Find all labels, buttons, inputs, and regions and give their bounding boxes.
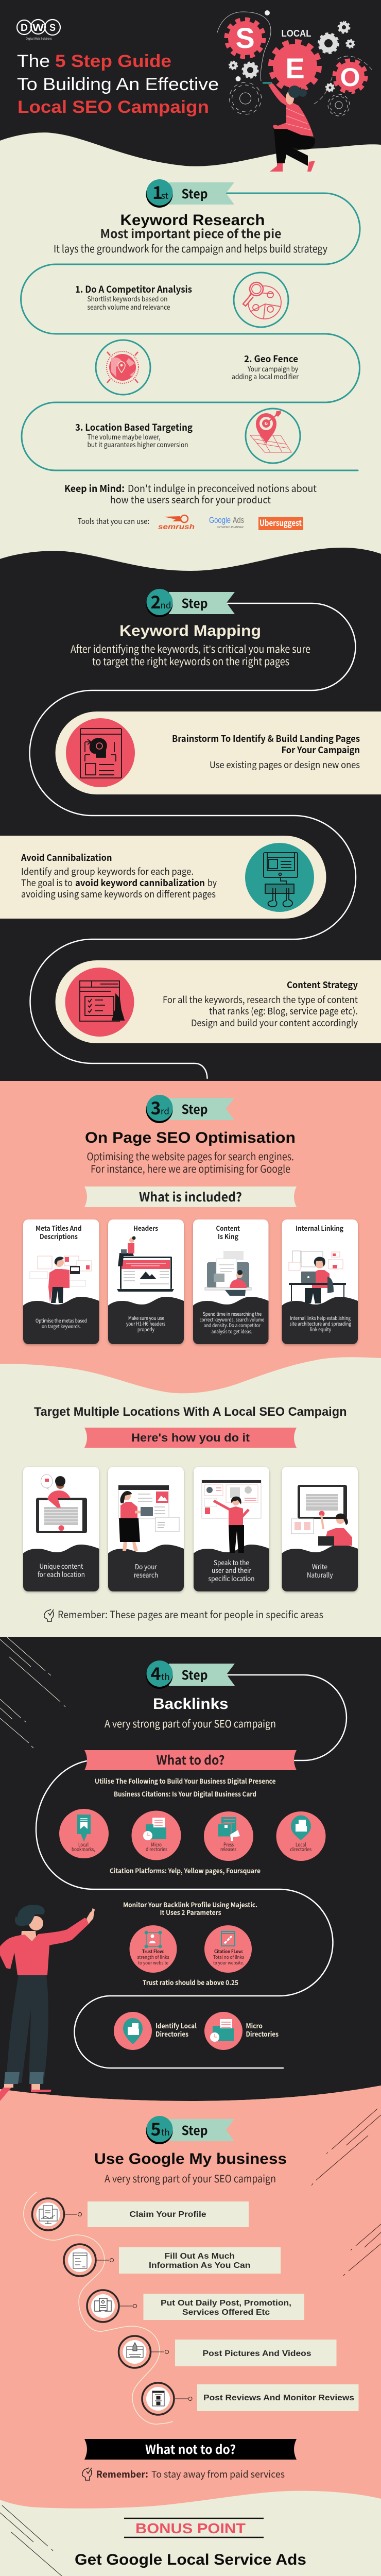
- heading: bonus point: BONUS POINT: [135, 2520, 246, 2536]
- title: Local SEO Campaign: [18, 97, 209, 117]
- text block: Use existing pages or design new ones: [210, 758, 360, 771]
- card text: speak to the user: specific location: [208, 1573, 254, 1583]
- heading: keyword research: It lays the groundwork for the campaign and helps build strategy: [54, 241, 328, 256]
- item 1: competitor analysis: [75, 282, 192, 312]
- card content: meta titles: Meta Titles And: [36, 1223, 81, 1233]
- step badge: 2nd: nd: [161, 598, 171, 611]
- icon: brainstorm browser: [80, 728, 122, 778]
- card content: headers: Headers: [133, 1223, 158, 1233]
- logo: semrush: semrush: [158, 522, 195, 531]
- gear: O: O: [340, 63, 360, 92]
- icon: head with check: [44, 1609, 54, 1621]
- text block: Avoid Cannibalization: [21, 851, 112, 864]
- text: digital presence: [95, 1776, 276, 1799]
- icon: monitor: [39, 2206, 57, 2224]
- card text: headers: [126, 1314, 165, 1333]
- banner: what to do: What to do?: [157, 1750, 224, 1768]
- text block: The goal is to: [21, 876, 73, 889]
- heading: keyword research: [54, 212, 328, 256]
- card text: internal linking: [289, 1314, 351, 1333]
- logo: DWS: [17, 20, 60, 41]
- heading: google my business: [94, 2150, 287, 2185]
- card content: content is king: [205, 1223, 251, 1296]
- text: digital presence: Business Citations: Is Your Digital Business Card: [114, 1789, 256, 1799]
- panel: brainstorm landing pages: [56, 711, 381, 794]
- logo: semrush: [158, 515, 195, 531]
- step badge: 1st: 1: [152, 179, 163, 204]
- item: identify local directories: [114, 2012, 197, 2050]
- banner: what not to do: [84, 2439, 297, 2460]
- card text: internal linking: site architecture and spreading: [289, 1319, 351, 1327]
- badge: local directories: Local: [296, 1840, 306, 1848]
- card content: content is king: Content: [216, 1223, 240, 1233]
- logo: google ads: KEYWORD PLANNER: [217, 526, 244, 529]
- row: fill out information: [64, 2244, 281, 2276]
- logo: google ads: [209, 515, 244, 529]
- text block: [21, 851, 217, 901]
- text block: avoid keyword cannibalization: [75, 876, 205, 889]
- text: monitor backlink: Monitor Your Backlink Profile Using Majestic.: [123, 1900, 257, 1909]
- heading: keyword mapping: [71, 622, 310, 668]
- item: micro directories: Directories: [246, 2028, 279, 2039]
- badge: local bookmarks: Local: [78, 1840, 89, 1848]
- card content: do your research: [118, 1485, 179, 1551]
- heading: keyword mapping: Keyword Mapping: [119, 622, 261, 639]
- heading: bonus point: [124, 2518, 264, 2537]
- row: reviews: Post Reviews And Monitor Reviews: [203, 2394, 354, 2402]
- card text: speak to the user: user and their: [212, 1565, 252, 1575]
- step badge: 5th: th: [161, 2125, 170, 2138]
- text block: For Your Campaign: [281, 743, 360, 756]
- badge: trust flow: Trust Flow:: [142, 1948, 165, 1955]
- gear: S: [227, 20, 264, 57]
- heading: backlinks: Backlinks: [153, 1696, 229, 1713]
- card text: do your research: [134, 1561, 158, 1580]
- decorative streaks: [311, 2109, 381, 2276]
- title: 5 Step Guide: [55, 52, 171, 71]
- row: fill out information: Information As You Can: [149, 2261, 250, 2270]
- heading: target multiple locations: Target Multiple Locations With A Local SEO Campaign: [34, 1405, 347, 1419]
- item 2: geo fence: Your campaign by: [247, 363, 298, 374]
- badge: local bookmarks: [59, 1809, 109, 1858]
- item: identify local directories: Identify Local: [155, 2020, 197, 2030]
- icon: rocket page: [127, 2343, 143, 2358]
- step badge: 3rd: Step: [181, 1099, 208, 1117]
- step badge: 4th: Step: [181, 1665, 208, 1683]
- card text: internal linking: link equity: [310, 1325, 332, 1333]
- card text: content is king: and density. Do a competitor: [204, 1321, 261, 1329]
- banner: here's how you do it: [84, 1428, 297, 1448]
- card text: meta titles: Optimise the metas based: [36, 1316, 87, 1324]
- gear: S: S: [235, 22, 255, 54]
- banner: what to do: [84, 1750, 297, 1770]
- badge: citation flow: Citation FLow:: [214, 1948, 244, 1955]
- item: micro directories: [204, 2012, 279, 2050]
- badge: micro directories: [132, 1810, 181, 1860]
- card text: content is king: Spend time in researching the: [203, 1310, 262, 1317]
- badge: local bookmarks: bookmarks,: [72, 1845, 95, 1853]
- step badge: 4th: [146, 1660, 235, 1689]
- text block: Design and build your content accordingly: [191, 1016, 358, 1029]
- badge: trust flow: strength of links: [137, 1954, 169, 1960]
- step badge: 2nd: [146, 588, 235, 617]
- heading: backlinks: [105, 1696, 276, 1731]
- card: write naturally: [282, 1467, 358, 1591]
- item 1: competitor analysis: search volume and relevance: [88, 301, 170, 312]
- text: citation platforms: Citation Platforms: Yelp, Yellow pages, Foursquare: [110, 1866, 261, 1875]
- icon: competitor analysis: [234, 273, 288, 327]
- card text: headers: your H1-H6 headers: [126, 1319, 165, 1327]
- heading: backlinks: A very strong part of your SEO campaign: [105, 1716, 276, 1731]
- card: do your research: [108, 1467, 184, 1591]
- keep in mind note: how the users search for your product: [110, 493, 271, 506]
- card: meta titles: [23, 1219, 99, 1344]
- path: white wavy track: [24, 2192, 172, 2424]
- badge: press releases: Press: [223, 1840, 234, 1848]
- text block: that ranks (eg: Blog, service page etc).: [209, 1004, 358, 1018]
- tools row: Tools that you can use:: [78, 516, 149, 527]
- text block: [172, 732, 360, 771]
- woman: [263, 83, 315, 172]
- card content: write naturally: [291, 1485, 352, 1546]
- text block: by: [207, 876, 217, 889]
- badge: press releases: releases: [220, 1845, 236, 1853]
- remember note: Remember: These pages are meant for people in specific areas: [58, 1606, 323, 1621]
- remember note: paid services: [82, 2467, 285, 2481]
- icon: form: [73, 2253, 87, 2268]
- card: headers: [108, 1219, 184, 1344]
- badge: citation flow: to your website.: [213, 1959, 244, 1966]
- heading: keyword research: Keyword Research: [120, 212, 265, 229]
- card text: do your research: Do your: [135, 1561, 158, 1571]
- logo: google ads: Google: [209, 515, 231, 525]
- card text: headers: properly: [137, 1325, 155, 1333]
- item 3: location based targeting: 3. Location Based Targeting: [75, 420, 193, 434]
- label: LOCAL: LOCAL: [281, 28, 311, 39]
- step badge: 5th: 5: [150, 2115, 161, 2141]
- row: daily post: Put Out Daily Post, Promotion,: [161, 2299, 291, 2308]
- card text: headers: Make sure you use: [128, 1314, 164, 1321]
- card content: content is king: Is King: [218, 1231, 238, 1241]
- row: claim your profile: Claim Your Profile: [130, 2210, 206, 2219]
- title: [17, 52, 219, 117]
- heading: on page seo: For instance, here we are optimising for Google: [91, 1161, 290, 1176]
- card: speak to the user: [194, 1467, 269, 1591]
- decorative streaks: [0, 2505, 68, 2576]
- card content: internal linking: Internal Linking: [296, 1223, 343, 1233]
- banner: what is included: [84, 1187, 297, 1207]
- step badge: 1st: [146, 179, 234, 208]
- heading: google my business: A very strong part of your SEO campaign: [105, 2171, 276, 2185]
- item 1: competitor analysis: 1. Do A Competitor Analysis: [75, 282, 192, 296]
- remember note: paid services: To stay away from paid services: [151, 2467, 285, 2481]
- step badge: 3rd: 3: [150, 1094, 161, 1120]
- step badge: 1st: Step: [181, 184, 208, 202]
- path: step 1 teal track: [21, 193, 360, 470]
- card text: write naturally: [307, 1561, 333, 1580]
- logo: DWS: Digital Web Solutions: [26, 37, 53, 41]
- banner: here's how you do it: Here's how you do it: [131, 1431, 250, 1444]
- logo: DWS: D: [21, 23, 28, 33]
- logo: DWS: W: [32, 23, 44, 33]
- card text: internal linking: Internal links help establishing: [290, 1314, 351, 1321]
- row: pictures and videos: Post Pictures And Videos: [203, 2349, 311, 2358]
- text: monitor backlink: [123, 1900, 257, 1917]
- badge: local directories: [276, 1811, 325, 1861]
- badge: local directories: directories: [290, 1845, 311, 1853]
- title: The: [17, 52, 50, 71]
- icon: geo fence globe: [96, 340, 150, 395]
- logo: ubersuggest: Ubersuggest: [259, 516, 302, 529]
- text block: avoiding using same keywords on different pages: [21, 887, 216, 901]
- row: daily post: [87, 2290, 304, 2322]
- gear: E: E: [285, 52, 305, 84]
- text block: Identify and group keywords for each page.: [21, 865, 194, 878]
- text block: Brainstorm To Identify & Build Landing Pages: [172, 732, 360, 745]
- item: identify local directories: Directories: [155, 2028, 188, 2039]
- gear: E: [271, 42, 319, 90]
- path: step 2 white track: [30, 603, 356, 1078]
- heading: on page seo: Optimising the website pages for search engines.: [86, 1148, 294, 1163]
- step badge: 3rd: rd: [161, 1104, 169, 1117]
- badge: trust flow: [130, 1925, 177, 1973]
- heading: on page seo: [85, 1129, 296, 1176]
- illustration: SEO gears with woman: [217, 10, 372, 172]
- step badge: 4th: th: [161, 1670, 170, 1683]
- card text: content is king: [200, 1310, 265, 1335]
- heading: keyword mapping: After identifying the keywords, it’s critical you make sure: [71, 641, 310, 656]
- card content: speak to the user: [202, 1480, 261, 1553]
- heading: keyword mapping: to target the right keywords on the right pages: [92, 653, 289, 668]
- badge: press releases: [204, 1811, 253, 1861]
- item 1: competitor analysis: Shortlist keywords based on: [88, 293, 168, 303]
- card text: meta titles: on target keywords.: [42, 1322, 81, 1330]
- icon: review page: [152, 2391, 164, 2406]
- item 2: geo fence: adding a local modifier: [232, 371, 299, 381]
- card text: speak to the user: Speak to the: [214, 1557, 249, 1567]
- keep in mind note: [64, 481, 317, 506]
- gear: O: [334, 60, 366, 92]
- step badge: 2nd: Step: [181, 594, 208, 612]
- heading: google local service ads: Get Google Local Service Ads: [75, 2551, 306, 2568]
- logo: google ads: Ads: [233, 515, 244, 525]
- card text: write naturally: Write: [312, 1561, 327, 1571]
- card content: headers: [117, 1223, 174, 1292]
- item 2: geo fence: 2. Geo Fence: [244, 352, 298, 365]
- card content: internal linking: [289, 1223, 346, 1303]
- step badge: 5th: Step: [181, 2121, 208, 2139]
- card text: unique content: Unique content: [39, 1561, 83, 1571]
- row: claim your profile: [32, 2198, 249, 2230]
- badge: citation flow: [204, 1925, 252, 1973]
- item: micro directories: Micro: [246, 2020, 263, 2030]
- step badge: 4th: 4: [150, 1660, 161, 1685]
- heading: keyword research: Most important piece of the pie: [100, 224, 281, 242]
- panel: avoid cannibalization: [0, 836, 326, 919]
- panel: content strategy: [56, 960, 381, 1043]
- card: content is king: [193, 1219, 269, 1344]
- text block: [163, 978, 358, 1029]
- text: digital presence: Utilise The Following to Build Your Business Digital Presence: [95, 1776, 276, 1786]
- item 3: location based targeting: but it guarantees higher conversion: [88, 439, 188, 449]
- tools row: [78, 515, 303, 531]
- row: daily post: Services Offered Etc: [182, 2308, 270, 2317]
- item 3: location based targeting: The volume maybe lower,: [88, 431, 161, 442]
- logo: DWS: S: [49, 23, 56, 33]
- card text: unique content: for each location: [38, 1569, 85, 1579]
- heading: on page seo: On Page SEO Optimisation: [85, 1129, 296, 1146]
- icon: computer and keyboard: [264, 853, 298, 907]
- card: unique content: [23, 1467, 99, 1591]
- badge: trust flow: to your website: [138, 1959, 168, 1966]
- text block: For all the keywords, research the type of content: [163, 993, 358, 1006]
- row: reviews: [142, 2383, 358, 2415]
- step badge: 2nd: 2: [150, 588, 161, 614]
- badge: micro directories: Micro: [151, 1840, 162, 1848]
- card text: content is king: analysis to get ideas.: [211, 1327, 252, 1335]
- card content: unique content: [36, 1475, 87, 1533]
- card content: meta titles: [30, 1223, 92, 1303]
- card text: content is king: correct keywords, search volume: [200, 1315, 265, 1323]
- badge: citation flow: Total no of links: [213, 1954, 244, 1960]
- keep in mind note: Keep in Mind:: [64, 481, 125, 495]
- keep in mind note: Don't indulge in preconceived notions about: [128, 481, 317, 495]
- badge: micro directories: directories: [146, 1845, 167, 1853]
- text: trust ratio: Trust ratio should be above 0.25: [143, 1977, 238, 1987]
- step badge: 3rd: [146, 1094, 234, 1123]
- item 2: geo fence: [232, 352, 299, 381]
- card: internal linking: [282, 1219, 358, 1344]
- remember note: paid services: Remember:: [96, 2467, 148, 2481]
- card text: speak to the user: [208, 1557, 254, 1583]
- step badge: 1st: st: [161, 189, 169, 201]
- row: fill out information: Fill Out As Much: [165, 2252, 235, 2261]
- card text: meta titles: [36, 1316, 87, 1330]
- card text: write naturally: Naturally: [307, 1569, 333, 1580]
- banner: what not to do: What not to do?: [145, 2439, 236, 2458]
- text block: Content Strategy: [287, 978, 358, 991]
- card content: meta titles: Descriptions: [40, 1231, 78, 1241]
- card text: unique content: [38, 1561, 85, 1579]
- decorative streaks: [0, 1637, 65, 1748]
- row: pictures and videos: [118, 2336, 337, 2368]
- text: monitor backlink: It Uses 2 Parameters: [160, 1907, 221, 1917]
- title: To Building An Effective: [17, 75, 219, 94]
- banner: what is included: What is included?: [139, 1187, 242, 1205]
- path: step 4 white track: [36, 1675, 347, 2068]
- item 3: location based targeting: [75, 420, 193, 449]
- heading: google my business: Use Google My business: [94, 2150, 287, 2167]
- icon: documents: [95, 2298, 111, 2311]
- illustration: woman pointing: [0, 1905, 95, 2101]
- icon: location target: [246, 409, 300, 463]
- card text: do your research: research: [134, 1569, 158, 1580]
- icon: content checklist: [80, 981, 124, 1021]
- step badge: 5th: [146, 2115, 234, 2144]
